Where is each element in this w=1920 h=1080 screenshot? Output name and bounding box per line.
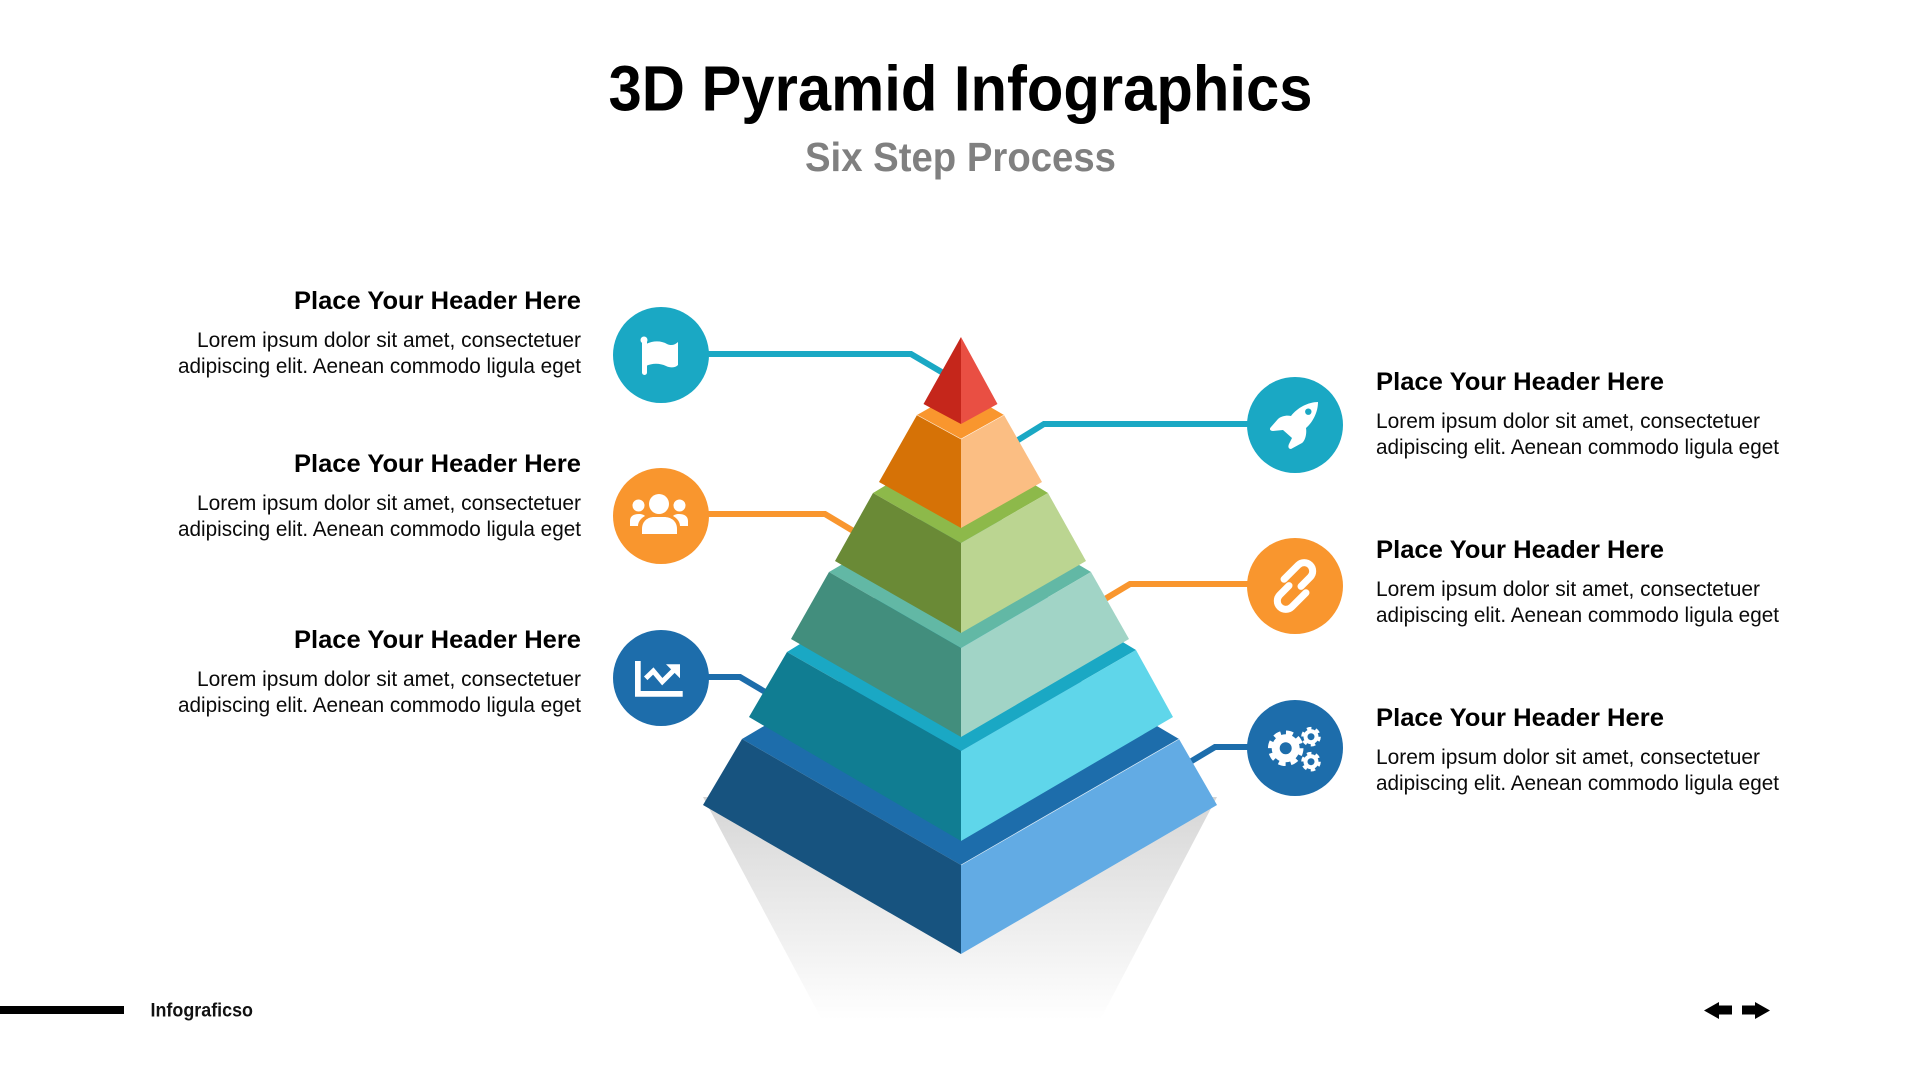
icon: chain link <box>1247 538 1343 634</box>
connector: step 2 <box>1010 424 1260 445</box>
connector: step 1 <box>690 354 950 377</box>
body text: Lorem ipsum dolor sit amet, consectetuer <box>1376 746 1760 769</box>
icon: flag <box>613 307 709 403</box>
heading: Place Your Header Here <box>294 450 581 478</box>
callout: step 3 left middle <box>178 450 709 564</box>
body text <box>1376 410 1779 459</box>
body text: adipiscing elit. Aenean commodo ligula eget <box>1376 436 1779 459</box>
body text <box>1376 578 1779 627</box>
pyramid layer: teal <box>791 495 1129 737</box>
body text: adipiscing elit. Aenean commodo ligula eget <box>178 355 581 378</box>
callout: step 5 left bottom <box>178 626 709 726</box>
body text: Lorem ipsum dolor sit amet, consectetuer <box>1376 410 1760 433</box>
body text: adipiscing elit. Aenean commodo ligula eget <box>1376 772 1779 795</box>
callout: step 1 left top <box>178 287 709 403</box>
body text: Lorem ipsum dolor sit amet, consectetuer <box>1376 578 1760 601</box>
callout: step 6 right bottom <box>1247 700 1779 796</box>
pyramid layer: red tip <box>924 337 998 424</box>
title: 3D Pyramid Infographics <box>608 52 1312 124</box>
connector: step 6 <box>1180 747 1260 768</box>
heading: Place Your Header Here <box>1376 704 1664 732</box>
3D pyramid <box>703 337 1217 954</box>
connector: step 4 <box>1095 584 1260 605</box>
body text: Lorem ipsum dolor sit amet, consectetuer <box>197 492 581 515</box>
footer brand: Infograficso <box>150 1000 253 1022</box>
callout: step 4 right middle <box>1247 536 1779 634</box>
body text <box>1376 746 1779 795</box>
pyramid layer: cyan <box>749 545 1173 841</box>
icon: gears <box>1247 700 1343 796</box>
pyramid layer: blue base <box>703 610 1217 954</box>
heading: Place Your Header Here <box>1376 368 1664 396</box>
arrow: next <box>1742 1002 1770 1019</box>
callout: step 2 right top <box>1247 368 1779 473</box>
heading: Place Your Header Here <box>294 287 581 315</box>
body text: Lorem ipsum dolor sit amet, consectetuer <box>197 668 581 691</box>
body text: adipiscing elit. Aenean commodo ligula eget <box>178 518 581 541</box>
arrow: previous <box>1704 1002 1732 1019</box>
body text: Lorem ipsum dolor sit amet, consectetuer <box>197 329 581 352</box>
body text: adipiscing elit. Aenean commodo ligula eget <box>1376 604 1779 627</box>
icon: line chart <box>613 630 709 726</box>
pyramid layer: orange <box>879 390 1042 528</box>
connector: step 3 <box>690 514 860 535</box>
icon: group of people <box>613 468 709 564</box>
subtitle: Six Step Process <box>805 134 1116 180</box>
footer bar <box>0 1006 124 1014</box>
heading: Place Your Header Here <box>1376 536 1664 564</box>
connector: step 5 <box>690 677 772 696</box>
body text <box>178 329 581 378</box>
pyramid shadow <box>703 797 1217 1020</box>
icon: rocket <box>1247 377 1343 473</box>
body text <box>178 492 581 541</box>
body text: adipiscing elit. Aenean commodo ligula eget <box>178 694 581 717</box>
pyramid layer: green <box>835 440 1086 633</box>
body text <box>178 668 581 717</box>
heading: Place Your Header Here <box>294 626 581 654</box>
